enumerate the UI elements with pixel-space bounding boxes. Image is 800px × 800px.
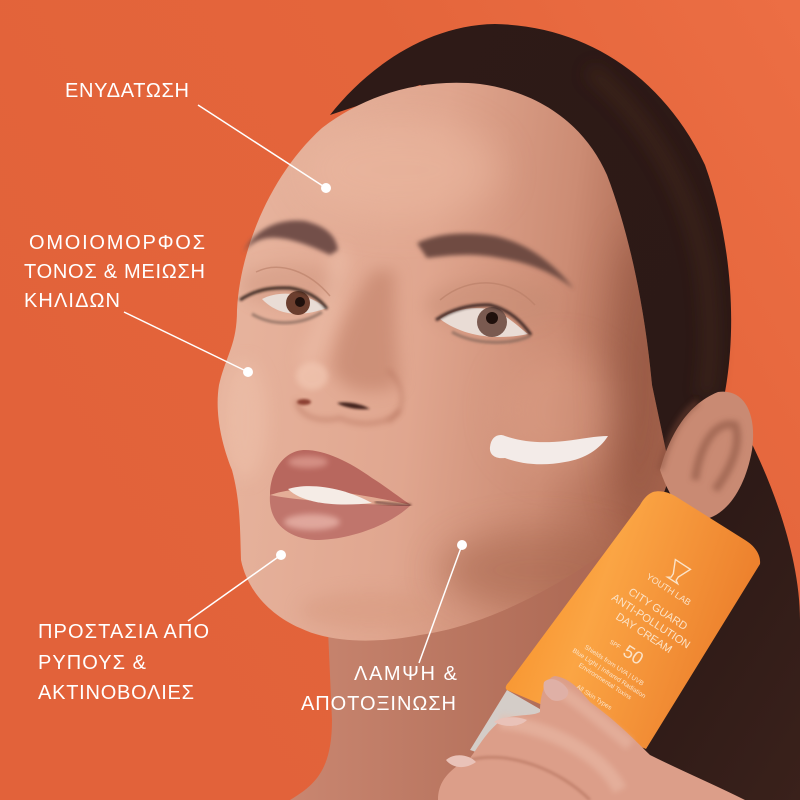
eyes [240, 267, 535, 342]
lips [270, 450, 411, 540]
product tube [470, 491, 760, 760]
neck [290, 500, 660, 800]
hand [438, 676, 745, 800]
callout: ΠΡΟΣΤΑΣΙΑ ΑΠΟ ΡΥΠΟΥΣ: ΑΚΤΙΝΟΒΟΛΙΕΣ [38, 682, 194, 704]
nose [296, 250, 402, 423]
product label: DAY CREAM [613, 611, 674, 656]
callout: ΠΡΟΣΤΑΣΙΑ ΑΠΟ ΡΥΠΟΥΣ: ΠΡΟΣΤΑΣΙΑ ΑΠΟ [38, 621, 209, 643]
callout: ΠΡΟΣΤΑΣΙΑ ΑΠΟ ΡΥΠΟΥΣ [38, 550, 286, 704]
product label: All Skin Types [575, 684, 613, 712]
callout: ΠΡΟΣΤΑΣΙΑ ΑΠΟ ΡΥΠΟΥΣ: ΡΥΠΟΥΣ & [38, 652, 147, 674]
callout: ΟΜΟΙΟΜΟΡΦΟΣ ΤΟΝΟΣ [24, 232, 253, 377]
product label: YOUTH LAB [645, 571, 693, 608]
silver collar [470, 690, 545, 760]
callout: ΟΜΟΙΟΜΟΡΦΟΣ ΤΟΝΟΣ: ΤΟΝΟΣ & ΜΕΙΩΣΗ [24, 261, 205, 283]
callout: ΛΑΜΨΗ & ΑΠΟΤΟΞΙΝΩΣΗ: ΑΠΟΤΟΞΙΝΩΣΗ [301, 693, 456, 715]
product label: Environmental Toxins [577, 662, 633, 702]
product label: SPF [608, 639, 621, 651]
callout: ΛΑΜΨΗ & ΑΠΟΤΟΞΙΝΩΣΗ: ΛΑΜΨΗ & [354, 663, 458, 685]
product label: 50 [619, 641, 647, 669]
product label [571, 560, 693, 712]
callout: ΛΑΜΨΗ & ΑΠΟΤΟΞΙΝΩΣΗ [301, 540, 467, 715]
product label: Shields from UVA | UVB [583, 644, 645, 688]
ear [660, 392, 753, 520]
cream swatch [490, 435, 608, 464]
eyebrows [243, 220, 574, 289]
callout: ΟΜΟΙΟΜΟΡΦΟΣ ΤΟΝΟΣ: ΟΜΟΙΟΜΟΡΦΟΣ [29, 232, 205, 254]
hair back [330, 24, 800, 800]
face [218, 83, 753, 641]
callout: ΕΝΥΔΑΤΩΣΗ: ΕΝΥΔΑΤΩΣΗ [65, 80, 189, 102]
callout: ΕΝΥΔΑΤΩΣΗ [65, 80, 331, 193]
product label: Blue Light | Infrared Radiation [571, 647, 647, 700]
product label: ANTI-POLLUTION [609, 592, 692, 651]
product label: CITY GUARD [626, 586, 689, 633]
callout: ΟΜΟΙΟΜΟΡΦΟΣ ΤΟΝΟΣ: ΚΗΛΙΔΩΝ [24, 290, 120, 312]
